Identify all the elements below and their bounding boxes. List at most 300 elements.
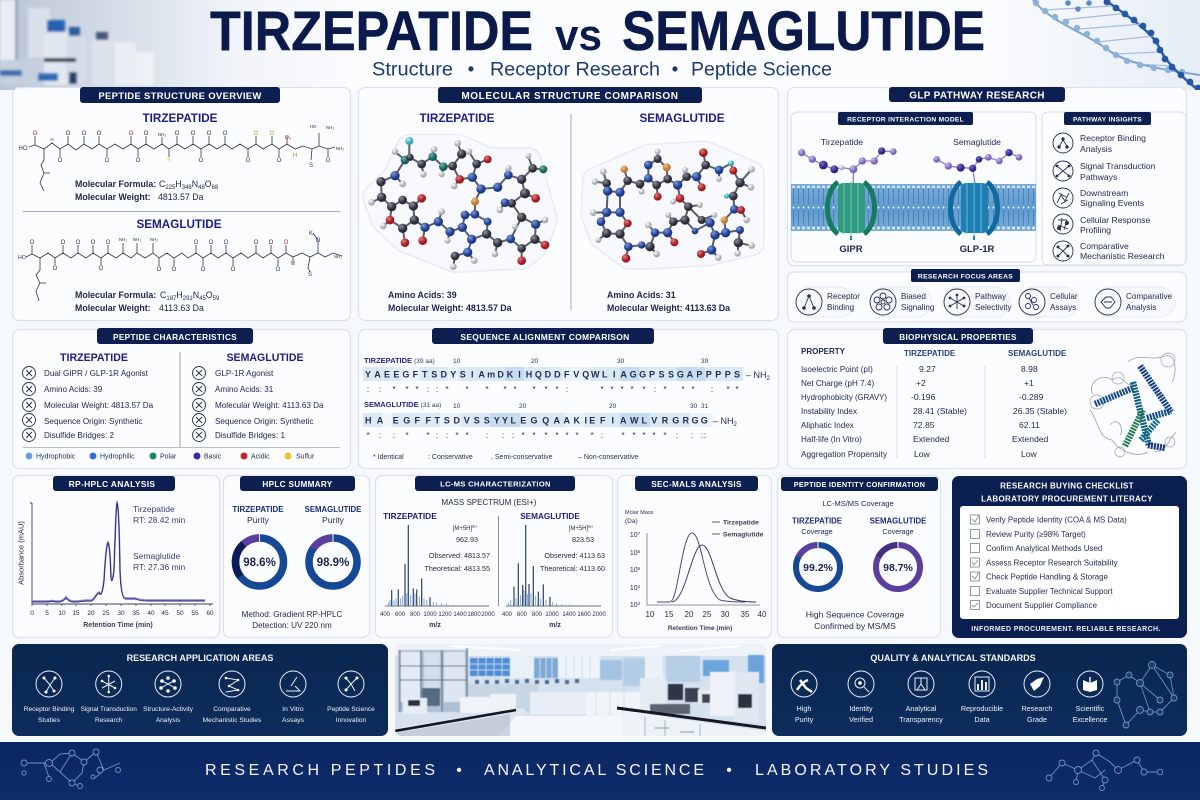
- structure: tirzepatide chain: O: [33, 131, 38, 137]
- SEC-MALS chart: 10: [630, 532, 638, 539]
- checklist box: [960, 506, 1179, 619]
- SEC-MALS chart: 10: [630, 550, 638, 557]
- SEC-MALS chart: 3: [638, 601, 641, 606]
- structure: tirzepatide chain: O: [175, 131, 180, 137]
- HPLC chromatogram: Absorbance (mAU): [16, 521, 26, 585]
- alignment legend: , Semi-conservative: [491, 454, 553, 461]
- heading: HPLC summary: [240, 476, 355, 491]
- spectrum: tirzepatide: 800: [410, 612, 421, 618]
- purity column: semaglutide: [305, 505, 361, 525]
- focus: pathway selectivity: Pathway: [975, 292, 1007, 301]
- heading: peptide identity confirmation: PEPTIDE IDENTITY CONFIRMATION: [794, 480, 925, 489]
- spectrum: semaglutide: 2000: [592, 612, 606, 618]
- annotation: tirzepatide mass: 962.93: [456, 535, 478, 544]
- molecular formula: semaglutide: 291: [183, 296, 193, 302]
- checklist box: Assess Receptor Research Suitability: [986, 558, 1118, 568]
- SEC-MALS chart: 10: [630, 567, 638, 574]
- structure: tirzepatide chain: O: [277, 158, 282, 164]
- property names: Net Charge (pH 7.4): [801, 379, 874, 388]
- name: semaglutide: SEMAGLUTIDE: [136, 218, 222, 231]
- heading: sequence alignment comparison: [432, 328, 654, 344]
- HPLC chromatogram: 20: [87, 610, 95, 617]
- structure: semaglutide chain: O: [76, 240, 81, 246]
- footer tagline: •: [456, 762, 462, 779]
- tirzepatide sequence: YAEEGFTSDYSIAmDKIHQDDFVQWLIAGGPSSGAPPPPS: [365, 370, 740, 380]
- coverage column: tirzepatide: TIRZEPATIDE: [792, 516, 842, 526]
- molecular formula: tirzepatide: N: [192, 179, 198, 189]
- spectrum: semaglutide: 1400: [562, 612, 576, 618]
- molecular formula: tirzepatide: 48: [198, 185, 205, 191]
- molecular formula: semaglutide: H: [176, 290, 183, 300]
- subtitle: [372, 60, 832, 80]
- footer tagline: ANALYTICAL SCIENCE: [484, 762, 704, 779]
- SEC-MALS chart: Molar Mass: [625, 510, 654, 516]
- focus: pathway selectivity: [944, 287, 1013, 317]
- heading: quality and analytical standards: QUALITY & ANALYTICAL STANDARDS: [870, 653, 1036, 663]
- residue legend: [26, 452, 315, 460]
- SEC-MALS chart: 7: [638, 531, 641, 536]
- characteristics list: semaglutide: Disulfide Bridges: 1: [215, 431, 285, 440]
- checklist box: Verify Peptide Identity (COA & MS Data): [986, 516, 1127, 524]
- SEC-MALS chart: 35: [741, 610, 750, 619]
- focus: receptor binding: Binding: [827, 303, 854, 312]
- semaglutide position numbers: 10: [453, 403, 460, 410]
- heading: GLP pathway research: GLP PATHWAY RESEARCH: [909, 90, 1045, 102]
- label: tirzepatide: Tirzepatide: [821, 137, 863, 147]
- method note: Detection: UV 220 nm: [252, 621, 332, 630]
- semaglutide sequence label: SEMAGLUTIDE (31 aa): [364, 400, 441, 409]
- semaglutide position numbers: 20: [519, 403, 527, 410]
- checklist title: LABORATORY PROCUREMENT LITERACY: [981, 494, 1153, 504]
- purity column: semaglutide: SEMAGLUTIDE: [305, 505, 361, 514]
- structure: tirzepatide chain: O: [199, 158, 204, 164]
- structure: semaglutide chain: O: [30, 240, 35, 246]
- property names: Hydrophobicity (GRAVY): [801, 393, 887, 402]
- structure: tirzepatide chain: NH₂: [336, 146, 344, 151]
- subtitle: Receptor Research: [490, 60, 660, 80]
- residue legend: Polar: [160, 454, 177, 460]
- insight: receptor binding analysis: [1053, 133, 1146, 154]
- receptor: GIPR: [828, 181, 874, 240]
- insight: cellular response profiling: Profiling: [1080, 225, 1111, 235]
- SEC-MALS chart: 10: [630, 602, 638, 609]
- annotation: tirzepatide mass: 5+: [472, 524, 478, 529]
- purity column: tirzepatide: Purity: [247, 515, 270, 525]
- molecular formula: semaglutide: 187: [166, 296, 177, 302]
- structure: semaglutide chain: S: [308, 272, 312, 278]
- purity column: tirzepatide: TIRZEPATIDE: [232, 505, 284, 514]
- heading: peptide identity confirmation: [781, 477, 938, 491]
- HPLC chromatogram: 0: [30, 610, 34, 617]
- annotation: tirzepatide retention time: RT: 28.42 min: [133, 515, 186, 525]
- panel: research buying checklist: [952, 476, 1187, 638]
- structure: tirzepatide chain: O: [254, 131, 259, 137]
- semaglutide values: [1012, 364, 1067, 459]
- structure: tirzepatide chain: O: [270, 131, 275, 137]
- panel: GLP pathway research: [788, 87, 1186, 266]
- spectrum: tirzepatide: 1000: [423, 612, 437, 618]
- structure: semaglutide chain: NH₂: [133, 237, 141, 242]
- panel: biophysical properties: [788, 328, 1186, 468]
- insight: comparative mechanistic research: Mechanistic Research: [1080, 251, 1165, 261]
- receptor: GLP-1R: [950, 181, 998, 240]
- heading: SEC-MALS analysis: SEC-MALS ANALYSIS: [651, 480, 742, 489]
- molecule 3D: semaglutide: [590, 148, 755, 263]
- focus: cellular assays: Assays: [1050, 303, 1076, 312]
- standard: reproducible data: Reproducible: [961, 704, 1003, 713]
- panel: peptide characteristics: [12, 328, 350, 468]
- coverage column: semaglutide: [870, 516, 926, 536]
- focus: comparative analysis: Comparative: [1126, 292, 1173, 301]
- panel: research application areas: [12, 644, 388, 736]
- structure: semaglutide chain: O: [99, 266, 104, 272]
- annotation: tirzepatide retention time: [133, 504, 186, 525]
- panel: research focus areas: [788, 269, 1186, 322]
- characteristics list: tirzepatide: Amino Acids: 39: [44, 385, 103, 394]
- annotation: semaglutide mass: 5+: [588, 524, 594, 529]
- structure: semaglutide chain: O: [269, 240, 274, 246]
- annotation: tirzepatide mass: Theoretical: 4813.55: [424, 564, 490, 573]
- standard: analytical transparency: Transparency: [899, 715, 943, 724]
- HPLC chromatogram: 55: [191, 610, 199, 617]
- spectrum: semaglutide: 600: [517, 612, 528, 618]
- tirzepatide values: +2: [916, 378, 926, 388]
- characteristics list: tirzepatide: Disulfide Bridges: 2: [44, 431, 114, 440]
- structure: tirzepatide chain: O: [82, 131, 87, 137]
- standard: analytical transparency: Analytical: [906, 704, 937, 713]
- characteristics list: tirzepatide: Molecular Weight: 4813.57 Da: [44, 401, 154, 410]
- panel: RP-HPLC analysis: [12, 476, 220, 638]
- heading: GLP pathway research: [889, 87, 1065, 102]
- panel: quality and analytical standards: [772, 644, 1187, 736]
- standard: reproducible data: [961, 671, 1003, 724]
- semaglutide position numbers: 31: [701, 403, 709, 410]
- title: [210, 0, 985, 62]
- characteristics list: tirzepatide: [22, 366, 154, 442]
- heading: peptide characteristics: [97, 328, 253, 344]
- annotation: semaglutide retention time: Semaglutide: [133, 551, 181, 561]
- footer tagline: LABORATORY STUDIES: [755, 762, 988, 779]
- spectrum: semaglutide: 1000: [545, 612, 559, 618]
- panel: molecular structure comparison: [358, 87, 778, 320]
- characteristics list: semaglutide: Molecular Weight: 4113.63 Da: [215, 401, 324, 410]
- spectrum: semaglutide: [502, 525, 606, 629]
- characteristics list: semaglutide: [192, 366, 324, 442]
- checklist footer: INFORMED PROCUREMENT. RELIABLE RESEARCH.: [971, 626, 1161, 633]
- standard: scientific excellence: Scientific: [1076, 704, 1105, 713]
- panel: peptide structure overview: [12, 87, 350, 320]
- chart legend: [712, 520, 764, 538]
- subheading: pathway insights: PATHWAY INSIGHTS: [1073, 116, 1142, 123]
- characteristics list: tirzepatide: Dual GIPR / GLP-1R Agonist: [44, 369, 149, 378]
- standard: high purity: High: [797, 704, 811, 713]
- spectrum: semaglutide: 400: [502, 612, 513, 618]
- tirzepatide values: 9.27: [919, 364, 936, 374]
- coverage note: [806, 610, 904, 631]
- HPLC chromatogram: Retention Time (min): [83, 622, 153, 629]
- semaglutide values: 62.11: [1019, 420, 1040, 430]
- application: signal transduction research: Signal Transduction: [81, 706, 137, 713]
- purity column: tirzepatide: [232, 505, 284, 525]
- DNA helix: [1033, 0, 1200, 91]
- coverage column: semaglutide: SEMAGLUTIDE: [870, 516, 926, 526]
- characteristics list: semaglutide: Sequence Origin: Synthetic: [215, 417, 313, 426]
- donut: semaglutide purity: [309, 534, 357, 586]
- subtitle: •: [672, 60, 678, 80]
- stats: semaglutide: [607, 290, 730, 313]
- footer molecule left: [21, 749, 120, 788]
- structure: semaglutide chain: H: [291, 261, 295, 267]
- HPLC chromatogram: 15: [72, 610, 80, 617]
- application: structure-activity analysis: Structure-Activity: [143, 706, 194, 713]
- panel: sequence alignment comparison: [358, 328, 778, 468]
- header image band: [0, 0, 1200, 91]
- standard: identity verified: Verified: [849, 715, 873, 724]
- insight: signal transduction pathways: [1053, 161, 1156, 182]
- residue legend: Hydrophilic: [100, 454, 135, 460]
- stats: tirzepatide: Molecular Weight: 4813.57 Da: [388, 303, 512, 313]
- name: tirzepatide: TIRZEPATIDE: [420, 112, 495, 125]
- structure: tirzepatide chain: O: [58, 158, 63, 164]
- structure: semaglutide chain: NH₂: [150, 237, 158, 242]
- subtitle: Peptide Science: [691, 60, 832, 80]
- spectrum: tirzepatide: [380, 525, 495, 629]
- heading: molecular structure comparison: [438, 87, 702, 103]
- title: SEMAGLUTIDE: [622, 0, 985, 62]
- structure: tirzepatide chain: O: [66, 131, 71, 137]
- stats: tirzepatide: Amino Acids: 39: [388, 290, 457, 300]
- column headers: SEMAGLUTIDE: [1008, 349, 1067, 358]
- property names: Aggregation Propensity: [801, 450, 888, 459]
- application: structure-activity analysis: [143, 671, 194, 724]
- alignment legend: – Non-conservative: [578, 454, 638, 461]
- focus: cellular assays: Cellular: [1050, 292, 1078, 301]
- footer tagline: [205, 762, 988, 779]
- HPLC chromatogram: 35: [132, 610, 140, 617]
- lab bottles photo: [0, 0, 154, 85]
- structure: tirzepatide chain: NH₂: [326, 125, 334, 130]
- structure: semaglutide chain: O: [209, 240, 214, 246]
- name: semaglutide: SEMAGLUTIDE: [226, 352, 304, 364]
- property names: Half-life (In Vitro): [801, 435, 862, 444]
- insight: receptor binding analysis: Analysis: [1080, 144, 1112, 154]
- insight: signal transduction pathways: Pathways: [1080, 172, 1117, 182]
- focus: comparative analysis: Analysis: [1126, 303, 1156, 312]
- panel: peptide identity confirmation: [778, 476, 940, 638]
- label: semaglutide: Semaglutide: [953, 137, 1001, 147]
- application: peptide science innovation: Innovation: [336, 717, 367, 724]
- standard: scientific excellence: Excellence: [1073, 715, 1107, 724]
- footer molecule right: [1046, 750, 1163, 790]
- semaglutide sequence: 2: [734, 422, 738, 428]
- name: semaglutide: SEMAGLUTIDE: [520, 512, 580, 521]
- tirzepatide values: Low: [914, 449, 931, 459]
- footer tagline: •: [726, 762, 732, 779]
- heading: peptide structure overview: [80, 87, 280, 103]
- SEC-MALS chart: 20: [685, 610, 694, 619]
- HPLC chromatogram: 60: [206, 610, 214, 617]
- SEC-MALS chart: 25: [703, 610, 712, 619]
- annotation: semaglutide retention time: [133, 551, 186, 572]
- subheading: receptor interaction model: [838, 112, 973, 125]
- insight: downstream signaling events: Downstream: [1080, 188, 1128, 198]
- application: comparative mechanistic studies: Mechanistic Studies: [203, 717, 262, 724]
- molecular formula: tirzepatide: C: [159, 179, 219, 191]
- tirzepatide values: [911, 364, 967, 459]
- semaglutide values: 8.98: [1021, 364, 1038, 374]
- structure: semaglutide chain: O: [254, 240, 259, 246]
- HPLC chromatogram: 45: [161, 610, 169, 617]
- SEC-MALS chart: 30: [721, 610, 730, 619]
- SEC-MALS chart: [625, 510, 767, 632]
- molecular formula: tirzepatide: 225: [165, 185, 176, 191]
- column headers: TIRZEPATIDE: [904, 349, 956, 358]
- peptide chain: tirzepatide: [798, 147, 897, 183]
- annotation: semaglutide mass: 823.53: [572, 535, 594, 544]
- subheading: LC-MS/MS coverage: LC-MS/MS Coverage: [822, 499, 894, 508]
- SEC-MALS chart: 10: [630, 585, 638, 592]
- heading: sequence alignment comparison: SEQUENCE ALIGNMENT COMPARISON: [460, 332, 630, 342]
- donut: semaglutide coverage: [876, 541, 920, 589]
- panel: HPLC summary: [224, 476, 370, 638]
- title: vs: [555, 11, 602, 60]
- focus: cellular assays: [1019, 287, 1079, 317]
- application: signal transduction research: Research: [95, 717, 123, 724]
- structure: tirzepatide chain: O: [105, 158, 110, 164]
- name: tirzepatide: TIRZEPATIDE: [60, 352, 128, 364]
- molecular formula: tirzepatide: 348: [182, 185, 192, 191]
- standard: research grade: [1022, 671, 1052, 724]
- focus: receptor binding: [796, 287, 860, 317]
- label: GIPR: GIPR: [839, 244, 863, 255]
- annotation: semaglutide mass: Theoretical: 4113.60: [540, 564, 605, 573]
- column headers: PROPERTY: [801, 347, 846, 356]
- annotation: tirzepatide mass: Observed: 4813.57: [429, 551, 490, 560]
- panel: SEC-MALS analysis: [618, 476, 772, 638]
- structure: tirzepatide chain: S: [309, 163, 313, 169]
- focus: comparative analysis: [1095, 287, 1175, 317]
- subheading: research focus areas: RESEARCH FOCUS AREAS: [918, 273, 1013, 280]
- standard: analytical transparency: [899, 671, 943, 724]
- standard: research grade: Research: [1022, 704, 1052, 713]
- structure: semaglutide chain: O: [194, 240, 199, 246]
- chart legend: Tirzepatide: [723, 520, 759, 526]
- tirzepatide values: 28.41 (Stable): [913, 406, 967, 416]
- HPLC chromatogram: 25: [102, 610, 110, 617]
- residue legend: Hydrophobic: [36, 454, 76, 460]
- donut: tirzepatide coverage: 99.2%: [803, 562, 834, 574]
- peptide chain: semaglutide: [933, 149, 1022, 183]
- standard: high purity: Purity: [795, 715, 814, 724]
- semaglutide conservation marks: *::**::**:::*******:*****::::: [366, 431, 706, 440]
- coverage column: semaglutide: Coverage: [882, 527, 914, 536]
- spectrum: semaglutide: m/z: [549, 622, 561, 629]
- molecular formula: semaglutide: O: [206, 290, 213, 300]
- spectrum: semaglutide: 1600: [577, 612, 591, 618]
- checklist title: RESEARCH BUYING CHECKLIST: [1000, 482, 1134, 490]
- application: peptide science innovation: Peptide Science: [327, 706, 375, 713]
- heading: peptide characteristics: PEPTIDE CHARACTERISTICS: [113, 332, 237, 342]
- property names: Isoelectric Point (pI): [801, 365, 873, 374]
- spectrum: tirzepatide: 1200: [438, 612, 452, 618]
- coverage column: tirzepatide: [792, 516, 842, 536]
- name: tirzepatide: TIRZEPATIDE: [383, 511, 437, 521]
- heading: HPLC summary: HPLC SUMMARY: [262, 480, 333, 489]
- heading: research application areas: RESEARCH APPLICATION AREAS: [127, 653, 273, 663]
- donut: tirzepatide purity: [236, 534, 284, 586]
- name: tirzepatide: TIRZEPATIDE: [143, 112, 218, 125]
- structure: semaglutide chain: HO: [18, 255, 27, 261]
- characteristics list: tirzepatide: Sequence Origin: Synthetic: [44, 417, 142, 426]
- donut: semaglutide coverage: 98.7%: [883, 562, 914, 574]
- HPLC chromatogram: 30: [117, 610, 125, 617]
- annotation: semaglutide mass: [540, 524, 605, 573]
- annotation: semaglutide mass: [M+5H]: [569, 526, 588, 532]
- application: receptor binding studies: Studies: [38, 717, 61, 724]
- heading: molecular structure comparison: MOLECULAR STRUCTURE COMPARISON: [461, 91, 679, 102]
- semaglutide values: 26.35 (Stable): [1013, 406, 1067, 416]
- property names: Aliphatic Index: [801, 421, 854, 430]
- structure: tirzepatide chain: O: [97, 131, 102, 137]
- HPLC chromatogram: 50: [176, 610, 184, 617]
- stats: semaglutide: Molecular Weight: 4113.63 Da: [607, 303, 730, 313]
- structure: semaglutide chain: O: [106, 240, 111, 246]
- lipid membrane: [791, 184, 1036, 231]
- molecular formula: semaglutide: C: [160, 290, 220, 302]
- subpanel: receptor interaction model: [791, 112, 1036, 262]
- checklist box: Evaluate Supplier Technical Support: [986, 587, 1113, 596]
- SEC-MALS chart: Retention Time (min): [668, 625, 732, 632]
- molecular weight: tirzepatide: Molecular Weight:: [75, 192, 151, 202]
- semaglutide position numbers: 20: [609, 403, 617, 410]
- insight: receptor binding analysis: Receptor Binding: [1080, 133, 1146, 143]
- structure: tirzepatide chain: O: [191, 131, 196, 137]
- heading: LC-MS characterization: LC-MS CHARACTERIZATION: [440, 480, 551, 489]
- standard: high purity: [791, 671, 817, 724]
- laboratory photo: [395, 644, 766, 736]
- focus: biased signaling: Signaling: [901, 303, 934, 312]
- structure: tirzepatide chain: S: [167, 158, 171, 164]
- checklist title: [981, 482, 1153, 504]
- alignment legend: : Conservative: [428, 454, 473, 461]
- application: comparative mechanistic studies: [203, 671, 262, 724]
- SEC-MALS chart: 40: [758, 610, 767, 619]
- subtitle: Structure: [372, 60, 453, 80]
- checklist box: Document Supplier Compliance: [986, 601, 1098, 610]
- molecular formula: tirzepatide: Molecular Formula:: [75, 179, 156, 189]
- application: in vitro assays: Assays: [282, 717, 305, 724]
- focus: biased signaling: [870, 287, 934, 317]
- structure: semaglutide chain: O: [316, 238, 321, 244]
- structure: tirzepatide chain: [18, 124, 344, 191]
- residue legend: Acidic: [251, 454, 270, 460]
- insight: downstream signaling events: [1053, 188, 1144, 208]
- subheading: research focus areas: [911, 269, 1020, 282]
- spectrum: tirzepatide: 600: [395, 612, 406, 618]
- structure: tirzepatide chain: O: [129, 131, 134, 137]
- tirzepatide values: Extended: [913, 434, 950, 444]
- tirzepatide position numbers: 39: [701, 358, 709, 365]
- standard: reproducible data: Data: [974, 715, 990, 724]
- insight: cellular response profiling: Cellular Response: [1080, 215, 1150, 225]
- stats: tirzepatide: [388, 290, 512, 313]
- panel: LC-MS characterization: [376, 476, 612, 638]
- structure: tirzepatide chain: HO: [18, 146, 28, 152]
- application: peptide science innovation: [327, 671, 375, 724]
- structure: tirzepatide chain: O: [246, 158, 251, 164]
- stats: semaglutide: Amino Acids: 31: [607, 290, 676, 300]
- annotation: tirzepatide mass: [M+5H]: [453, 526, 472, 532]
